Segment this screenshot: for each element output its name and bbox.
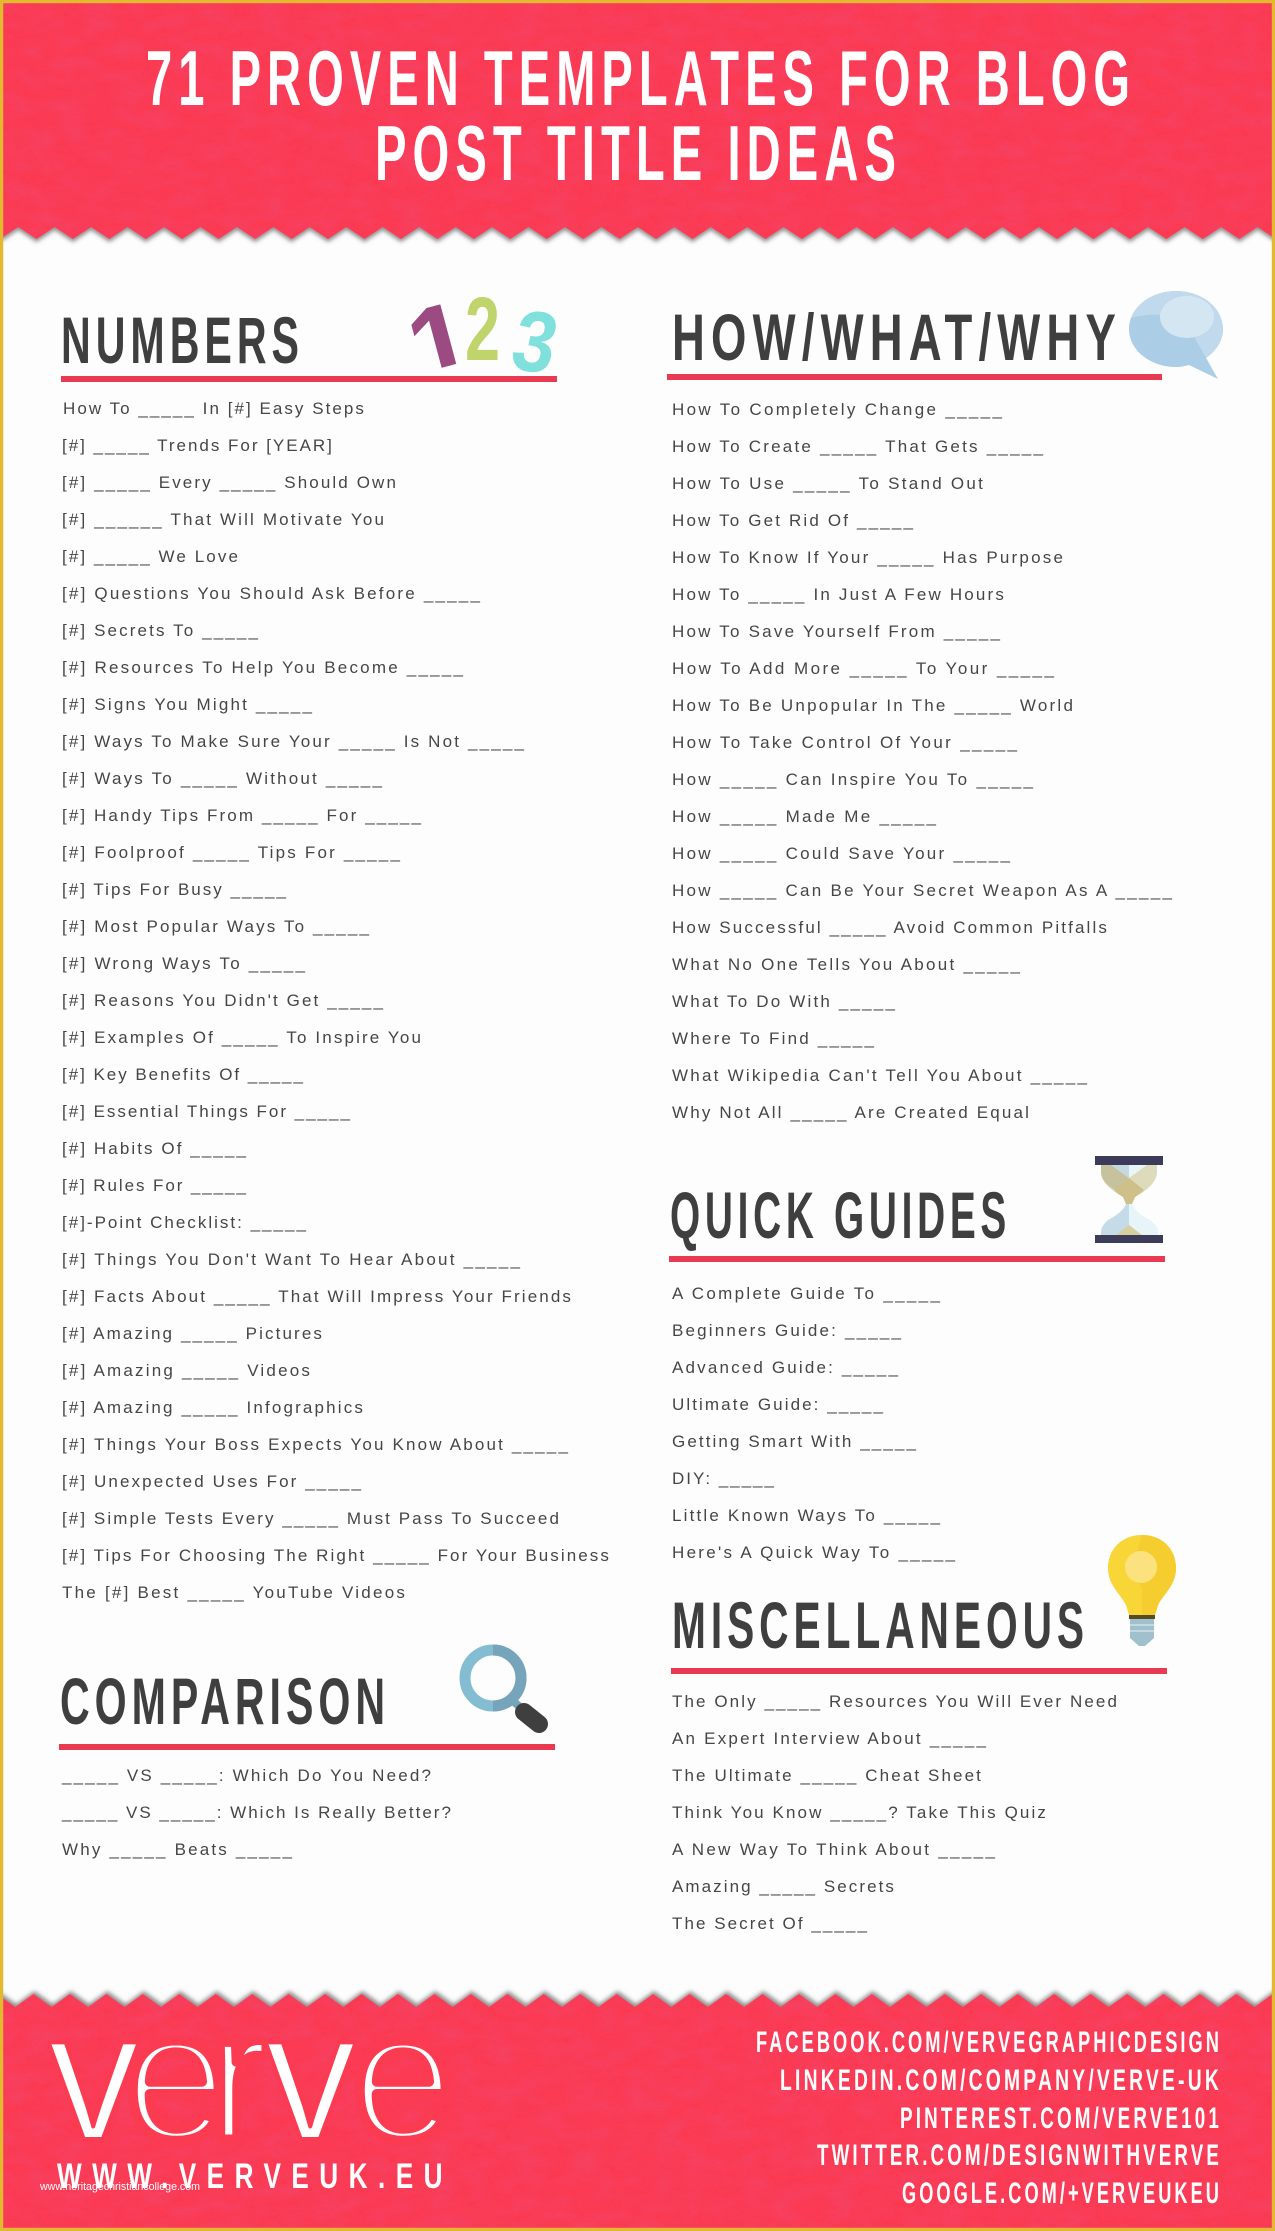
- list: quick guides templates: A Complete Guide To _____: [672, 1284, 942, 1303]
- icon: magnifying glass: [465, 1650, 539, 1724]
- list: numbers templates: [#] _____ Every _____ Should Own: [62, 473, 398, 492]
- footer website: WWW.VERVEUK.EU: [57, 2157, 453, 2196]
- panel: miscellaneous: [671, 1535, 1176, 1933]
- list: numbers templates: [#] Amazing _____ Pictures: [62, 1324, 324, 1343]
- list: numbers templates: The [#] Best _____ YouTube Videos: [62, 1583, 407, 1602]
- list: how what why templates: How To Save Yourself From _____: [672, 622, 1002, 641]
- list: quick guides templates: Beginners Guide: _____: [672, 1321, 903, 1340]
- footer social links: [756, 2026, 1222, 2210]
- list: quick guides templates: DIY: _____: [672, 1469, 776, 1488]
- icon: 1 2 3: 1: [395, 277, 486, 411]
- list: numbers templates: [#] Resources To Help You Become _____: [62, 658, 465, 677]
- list: how what why templates: Where To Find _____: [672, 1029, 876, 1048]
- list: numbers templates: [62, 399, 611, 1602]
- list: miscellaneous templates: Amazing _____ Secrets: [672, 1877, 896, 1896]
- panel: numbers: [61, 277, 611, 1602]
- heading rule: [59, 1744, 555, 1750]
- list: how what why templates: What No One Tells You About _____: [672, 955, 1022, 974]
- footer logo: verve: e: [352, 1973, 454, 2178]
- list: numbers templates: [#] Things Your Boss Expects You Know About _____: [62, 1435, 570, 1454]
- list: quick guides templates: [672, 1284, 957, 1562]
- list: how what why templates: How To _____ In Just A Few Hours: [672, 585, 1006, 604]
- icon: speech bubble: [1129, 291, 1223, 379]
- list: numbers templates: [#] Amazing _____ Videos: [62, 1361, 312, 1380]
- icon: 1 2 3: 2: [465, 280, 500, 380]
- list: how what why templates: How To Completely Change _____: [672, 400, 1004, 419]
- list: miscellaneous templates: The Ultimate _____ Cheat Sheet: [672, 1766, 983, 1785]
- heading: numbers: NUMBERS: [61, 303, 304, 377]
- list: numbers templates: [#] Ways To _____ Without _____: [62, 769, 384, 788]
- list: numbers templates: [#] _____ We Love: [62, 547, 240, 566]
- list: numbers templates: [#] Rules For _____: [62, 1176, 248, 1195]
- list: miscellaneous templates: The Only _____ Resources You Will Ever Need: [672, 1692, 1119, 1711]
- list: numbers templates: [#] Things You Don't Want To Hear About _____: [62, 1250, 522, 1269]
- list: numbers templates: [#]-Point Checklist: _____: [62, 1213, 308, 1232]
- list: numbers templates: [#] Ways To Make Sure Your _____ Is Not _____: [62, 732, 526, 751]
- list: numbers templates: [#] _____ Trends For [YEAR]: [62, 436, 334, 455]
- list: miscellaneous templates: An Expert Interview About _____: [672, 1729, 988, 1748]
- footer logo: verve: v: [48, 1973, 140, 2178]
- footer logo: verve: e: [125, 1973, 227, 2178]
- list: numbers templates: [#] Reasons You Didn't Get _____: [62, 991, 385, 1010]
- footer logo: verve: v: [265, 1973, 356, 2178]
- list: miscellaneous templates: Think You Know _____? Take This Quiz: [672, 1803, 1048, 1822]
- list: how what why templates: What Wikipedia Can't Tell You About _____: [672, 1066, 1089, 1085]
- panel: quick guides: [669, 1156, 1165, 1562]
- footer logo: verve: r: [208, 1973, 269, 2178]
- list: how what why templates: How To Get Rid Of _____: [672, 511, 915, 530]
- list: quick guides templates: Getting Smart With _____: [672, 1432, 918, 1451]
- list: how what why templates: [672, 400, 1174, 1122]
- list: numbers templates: [#] Tips For Busy _____: [62, 880, 288, 899]
- list: numbers templates: [#] Questions You Should Ask Before _____: [62, 584, 482, 603]
- list: miscellaneous templates: [672, 1692, 1119, 1933]
- list: numbers templates: [#] Key Benefits Of _____: [62, 1065, 305, 1084]
- list: numbers templates: [#] Unexpected Uses For _____: [62, 1472, 363, 1491]
- footer banner with zigzag edge: [0, 1994, 1275, 2231]
- list: quick guides templates: Ultimate Guide: _____: [672, 1395, 885, 1414]
- list: how what why templates: How To Take Control Of Your _____: [672, 733, 1019, 752]
- list: quick guides templates: Advanced Guide: _____: [672, 1358, 900, 1377]
- list: how what why templates: How _____ Could Save Your _____: [672, 844, 1012, 863]
- icon: hourglass: [1095, 1156, 1163, 1243]
- list: numbers templates: [#] Signs You Might _____: [62, 695, 314, 714]
- heading rule: [669, 1256, 1165, 1262]
- list: how what why templates: How Successful _____ Avoid Common Pitfalls: [672, 918, 1109, 937]
- list: how what why templates: How To Add More _____ To Your _____: [672, 659, 1056, 678]
- list: comparison templates: Why _____ Beats _____: [62, 1840, 294, 1859]
- panel: comparison: [59, 1650, 555, 1859]
- list: how what why templates: What To Do With _____: [672, 992, 897, 1011]
- list: numbers templates: [#] Foolproof _____ Tips For _____: [62, 843, 402, 862]
- list: miscellaneous templates: The Secret Of _____: [672, 1914, 869, 1933]
- icon: light bulb: [1108, 1535, 1176, 1646]
- list: how what why templates: How _____ Can Be Your Secret Weapon As A _____: [672, 881, 1174, 900]
- title: [146, 34, 1136, 197]
- list: numbers templates: How To _____ In [#] Easy Steps: [63, 399, 366, 418]
- list: quick guides templates: Here's A Quick Way To _____: [672, 1543, 957, 1562]
- list: numbers templates: [#] Habits Of _____: [62, 1139, 248, 1158]
- list: comparison templates: [61, 1766, 453, 1859]
- list: how what why templates: Why Not All _____ Are Created Equal: [672, 1103, 1031, 1122]
- list: numbers templates: [#] Tips For Choosing The Right _____ For Your Business: [62, 1546, 611, 1565]
- list: how what why templates: How To Use _____ To Stand Out: [672, 474, 985, 493]
- list: how what why templates: How To Be Unpopular In The _____ World: [672, 696, 1075, 715]
- list: numbers templates: [#] Handy Tips From _____ For _____: [62, 806, 423, 825]
- list: numbers templates: [#] Simple Tests Every _____ Must Pass To Succeed: [62, 1509, 561, 1528]
- list: numbers templates: [#] Facts About _____ That Will Impress Your Friends: [62, 1287, 573, 1306]
- list: how what why templates: How _____ Made Me _____: [672, 807, 938, 826]
- list: comparison templates: _____ VS _____: Which Is Really Better?: [61, 1803, 453, 1822]
- list: numbers templates: [#] Secrets To _____: [62, 621, 260, 640]
- list: numbers templates: [#] Wrong Ways To _____: [62, 954, 307, 973]
- heading rule: [667, 374, 1162, 380]
- list: numbers templates: [#] ______ That Will Motivate You: [62, 510, 386, 529]
- list: numbers templates: [#] Most Popular Ways To _____: [62, 917, 371, 936]
- list: how what why templates: How To Create _____ That Gets _____: [672, 437, 1045, 456]
- list: how what why templates: How _____ Can Inspire You To _____: [672, 770, 1035, 789]
- list: miscellaneous templates: A New Way To Think About _____: [672, 1840, 997, 1859]
- heading: comparison: COMPARISON: [60, 1664, 390, 1738]
- list: quick guides templates: Little Known Ways To _____: [672, 1506, 942, 1525]
- list: comparison templates: _____ VS _____: Which Do You Need?: [61, 1766, 433, 1785]
- title: POST TITLE IDEAS: [375, 109, 902, 197]
- icon: 1 2 3: 3: [504, 292, 566, 393]
- list: numbers templates: [#] Examples Of _____ To Inspire You: [62, 1028, 423, 1047]
- list: numbers templates: [#] Amazing _____ Infographics: [62, 1398, 365, 1417]
- heading: quick guides: QUICK GUIDES: [670, 1178, 1011, 1252]
- list: how what why templates: How To Know If Your _____ Has Purpose: [672, 548, 1065, 567]
- heading rule: [61, 376, 557, 382]
- heading rule: [671, 1668, 1167, 1674]
- panel: how what why: [667, 291, 1223, 1122]
- list: numbers templates: [#] Essential Things For _____: [62, 1102, 352, 1121]
- icon: 1 2 3: [411, 297, 556, 372]
- header banner with zigzag edge: [0, 0, 1275, 239]
- watermark: www.heritagechristiancollege.com: [39, 2181, 200, 2193]
